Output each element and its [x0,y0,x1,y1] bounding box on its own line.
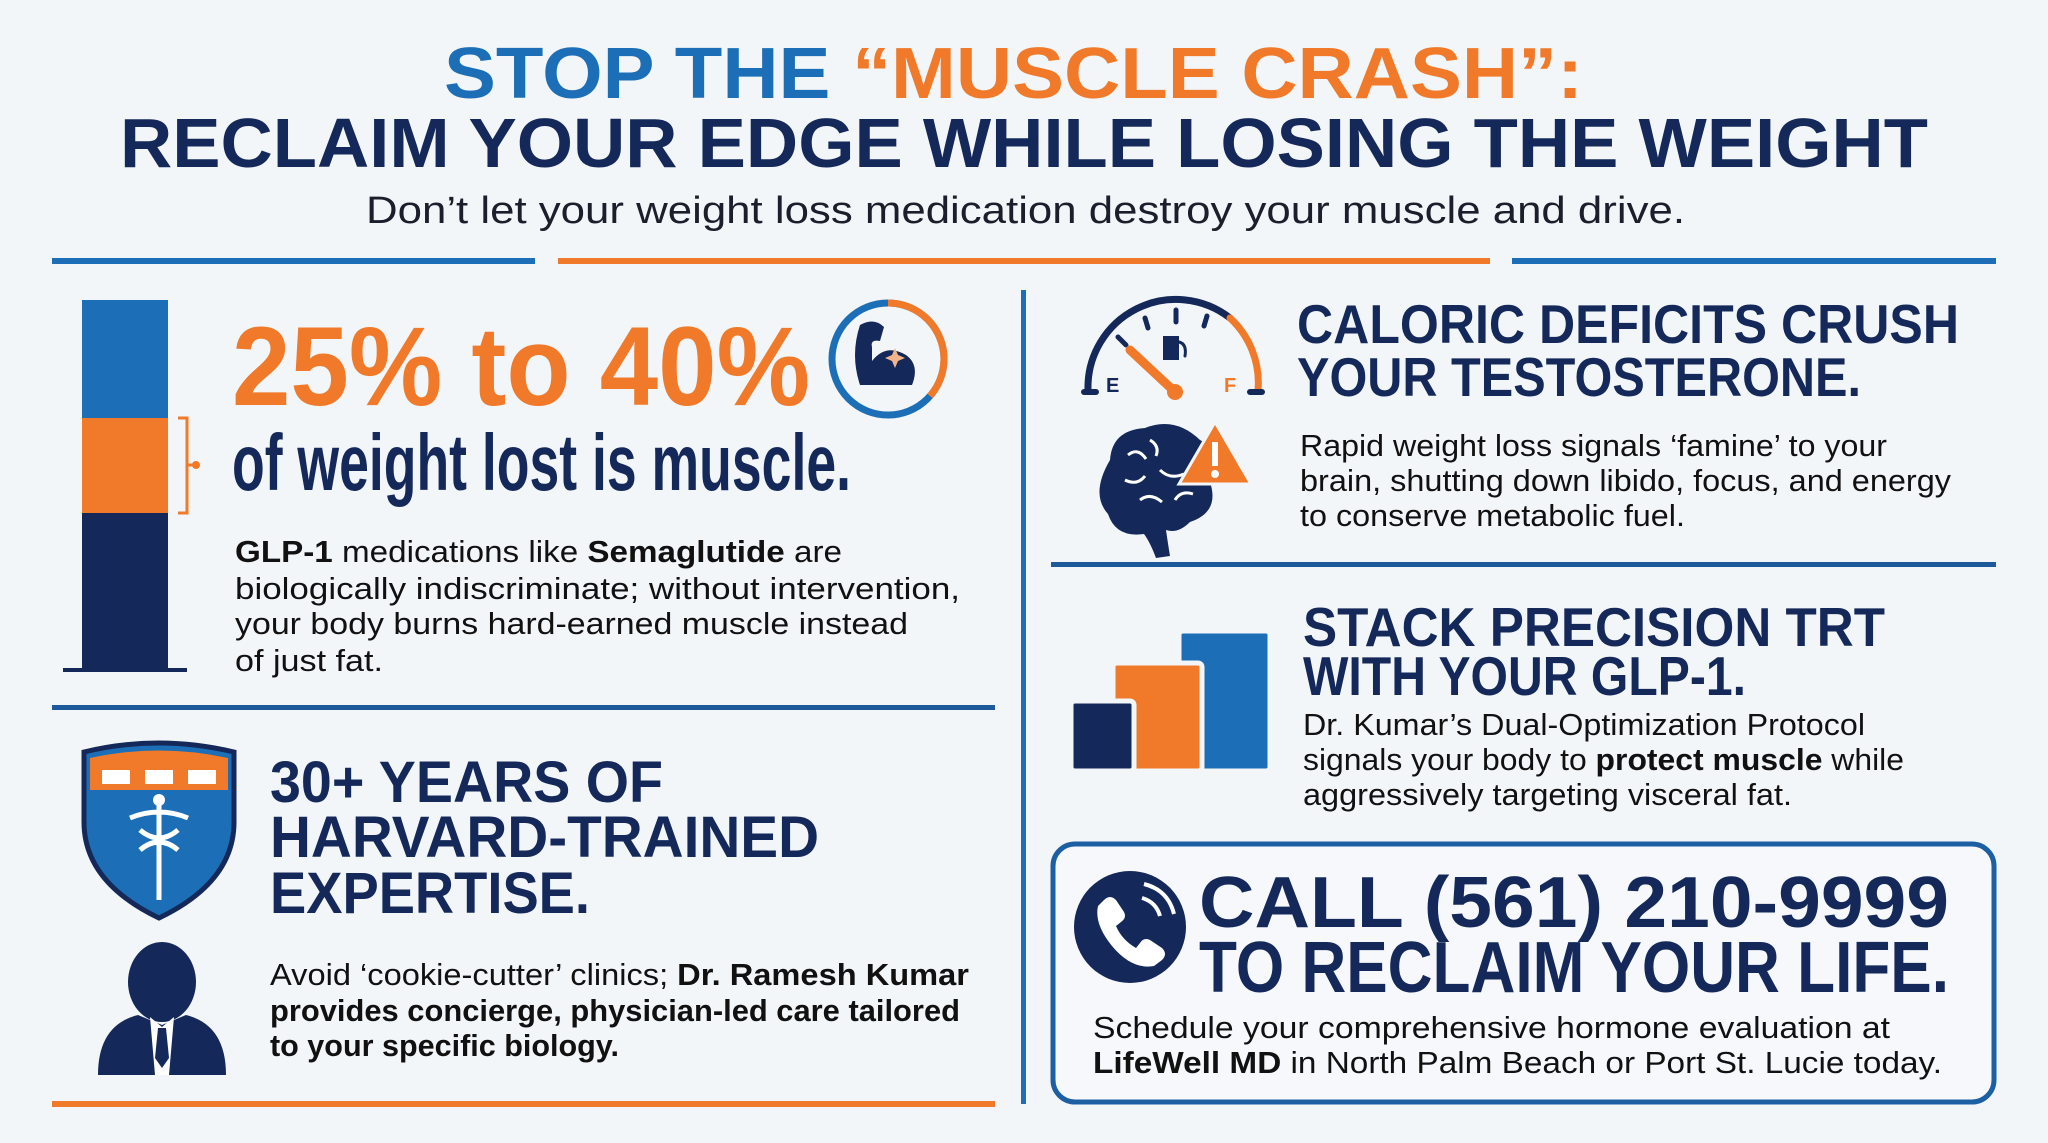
stat subheading: of weight lost is muscle. [232,418,851,507]
heading: expertise: 30+ YEARS OF [270,750,663,815]
text: concierge care: provides concierge, physician-led care tailored [270,993,960,1028]
subtitle: Don’t let your weight loss medication destroy your muscle and drive. [366,190,1685,232]
text: concierge care [270,957,969,1063]
text: protocol: Dr. Kumar’s Dual-Optimization Protocol [1303,707,1865,742]
heading: stack TRT: STACK PRECISION TRT [1303,596,1885,658]
text: famine signal: to conserve metabolic fuel. [1300,498,1685,533]
icon: fuel gauge [1084,299,1262,400]
text: protocol: aggressively targeting visceral fat. [1303,777,1792,812]
heading: expertise: HARVARD-TRAINED [270,805,819,870]
icon: flexed muscle [832,303,944,415]
panel: stack TRT [1071,596,1904,812]
text: GLP-1 explanation [235,534,960,678]
panel: muscle loss stat [63,300,960,678]
panel: testosterone: E [1106,375,1119,397]
panel: testosterone: F [1224,375,1236,397]
text: famine signal: brain, shutting down libido, focus, and energy [1300,463,1952,498]
title: STOP THE “MUSCLE CRASH”: [444,34,1583,114]
text: GLP-1 explanation: your body burns hard-earned muscle instead [235,606,908,641]
text: GLP-1 explanation: of just fat. [235,643,383,678]
icon: brain warning [1099,422,1251,558]
heading: expertise: EXPERTISE. [270,861,590,926]
heading: expertise [270,750,819,926]
heading: caloric deficits: YOUR TESTOSTERONE. [1297,346,1861,408]
text: protocol: signals your body to protect muscle while [1303,742,1904,777]
heading: phone number: CALL (561) 210-9999 [1199,863,1949,943]
text: famine signal [1300,428,1952,533]
heading: phone number: TO RECLAIM YOUR LIFE. [1199,928,1949,1008]
icon: rising bars [1071,631,1270,771]
icon: harvard shield [84,743,234,918]
panel: testosterone [1084,293,1959,558]
icon: phone [1074,871,1186,983]
text: famine signal: Rapid weight loss signals ‘famine’ to your [1300,428,1887,463]
heading: caloric deficits [1297,293,1959,408]
text: schedule: LifeWell MD in North Palm Beach or Port St. Lucie today. [1093,1045,1942,1080]
text: schedule [1093,1010,1942,1080]
stat heading: 25% to 40% [232,304,810,429]
title: RECLAIM YOUR EDGE WHILE LOSING THE WEIGHT [120,104,1928,182]
title [120,34,1928,182]
text: schedule: Schedule your comprehensive hormone evaluation at [1093,1010,1890,1045]
heading: stack TRT [1303,596,1885,707]
panel: expertise [84,743,969,1075]
text: protocol [1303,707,1904,812]
text: GLP-1 explanation: GLP-1 medications like Semaglutide are [235,534,842,569]
bar chart: weight composition [63,300,200,672]
heading: stack TRT: WITH YOUR GLP-1. [1303,645,1746,707]
icon: doctor [98,942,226,1075]
text: GLP-1 explanation: biologically indiscriminate; without intervention, [235,571,960,606]
heading: phone number [1199,863,1949,1008]
text: concierge care: to your specific biology. [270,1028,619,1063]
text: concierge care: Avoid ‘cookie-cutter’ clinics; Dr. Ramesh Kumar [270,957,969,992]
heading: caloric deficits: CALORIC DEFICITS CRUSH [1297,293,1959,355]
callout: call to action [1053,844,1994,1102]
